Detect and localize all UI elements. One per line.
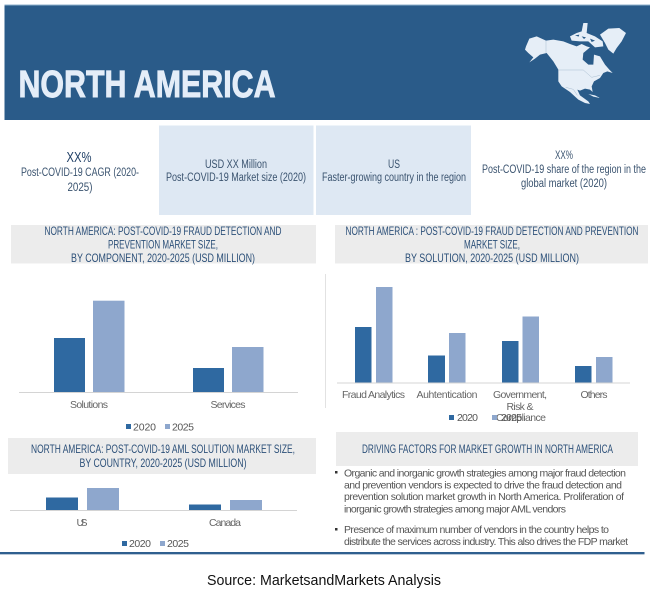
- bar chart: by component: Services: [210, 399, 246, 411]
- bar chart: AML by country: [10, 488, 297, 550]
- legend: [449, 412, 522, 424]
- stat: fastest-growing country: [316, 126, 471, 215]
- stat: CAGR: XX%: [66, 149, 92, 166]
- stat: regional share: XX%: [555, 150, 573, 162]
- stat: market size: [159, 126, 314, 215]
- legend: 2025: [167, 538, 189, 550]
- icon: North America map: [525, 23, 626, 104]
- heading: by component: BY COMPONENT, 2020-2025 (USD MILLION): [71, 251, 255, 265]
- stat: CAGR: 2025): [68, 182, 93, 194]
- legend: 2025: [172, 422, 194, 434]
- bar chart: by solution: Government,: [493, 389, 547, 401]
- stat: regional share: global market (2020): [521, 178, 607, 190]
- heading: by component: PREVENTION MARKET SIZE,: [108, 238, 218, 252]
- heading: driving factors: [336, 432, 638, 466]
- heading: AML by country: BY COUNTRY, 2020-2025 (USD MILLION): [80, 456, 246, 470]
- source note: Source: MarketsandMarkets Analysis: [207, 572, 441, 589]
- bar chart: by solution: Compliance: [496, 412, 546, 424]
- text block: driving factors bullets: inorganic growth strategies among major AML vendors: [344, 504, 566, 516]
- bar chart: by solution: Auhtentication: [416, 389, 478, 401]
- stat: regional share: [482, 150, 646, 190]
- bar chart: by solution: Risk &: [506, 401, 534, 413]
- legend: [126, 422, 194, 434]
- stat: CAGR: [21, 149, 139, 194]
- text block: driving factors bullets: prevention solution market growth in North America. Proliferation of: [344, 491, 624, 503]
- text block: driving factors bullets: [335, 468, 628, 548]
- text block: driving factors bullets: Organic and inorganic growth strategies among major fraud detection: [344, 468, 626, 480]
- bar chart: AML by country: US: [76, 517, 88, 529]
- bar chart: by component: Solutions: [70, 399, 108, 411]
- stat: CAGR: Post-COVID-19 CAGR (2020-: [21, 167, 139, 179]
- text block: driving factors bullets: Presence of maximum number of vendors in the country helps to: [344, 524, 609, 536]
- bar chart: AML by country: Canada: [209, 517, 241, 529]
- bar chart: by solution: Fraud Analytics: [342, 389, 405, 401]
- heading: by solution: [335, 224, 648, 265]
- text block: driving factors bullets: and prevention vendors is expected to drive the fraud detection and: [344, 480, 622, 492]
- bar chart: by component: [19, 301, 298, 434]
- text block: driving factors bullets: distribute the services across industry. This also drives the FDP market: [344, 536, 628, 548]
- legend: [122, 538, 189, 550]
- heading: by component: [11, 224, 316, 265]
- heading: by solution: BY SOLUTION, 2020-2025 (USD MILLION): [405, 251, 579, 265]
- header banner: [4, 4, 650, 120]
- title: NORTH AMERICA: [18, 64, 276, 106]
- stat: fastest-growing country: Faster-growing country in the region: [322, 172, 466, 184]
- legend: 2020: [133, 422, 156, 434]
- heading: by solution: MARKET SIZE,: [464, 238, 520, 252]
- heading: AML by country: [8, 438, 316, 474]
- stat: market size: Post-COVID-19 Market size (2020): [166, 172, 306, 184]
- legend: 2020: [129, 538, 151, 550]
- stat: market size: USD XX Million: [205, 159, 267, 171]
- heading: AML by country: NORTH AMERICA: POST-COVID-19 AML SOLUTION MARKET SIZE,: [31, 442, 295, 456]
- legend: 2025: [501, 412, 522, 424]
- bar chart: by solution: Others: [580, 389, 608, 401]
- heading: by component: NORTH AMERICA: POST-COVID-19 FRAUD DETECTION AND: [44, 224, 282, 238]
- stat: fastest-growing country: US: [388, 159, 400, 171]
- bar chart: by solution: [337, 287, 630, 424]
- legend: 2020: [457, 412, 478, 424]
